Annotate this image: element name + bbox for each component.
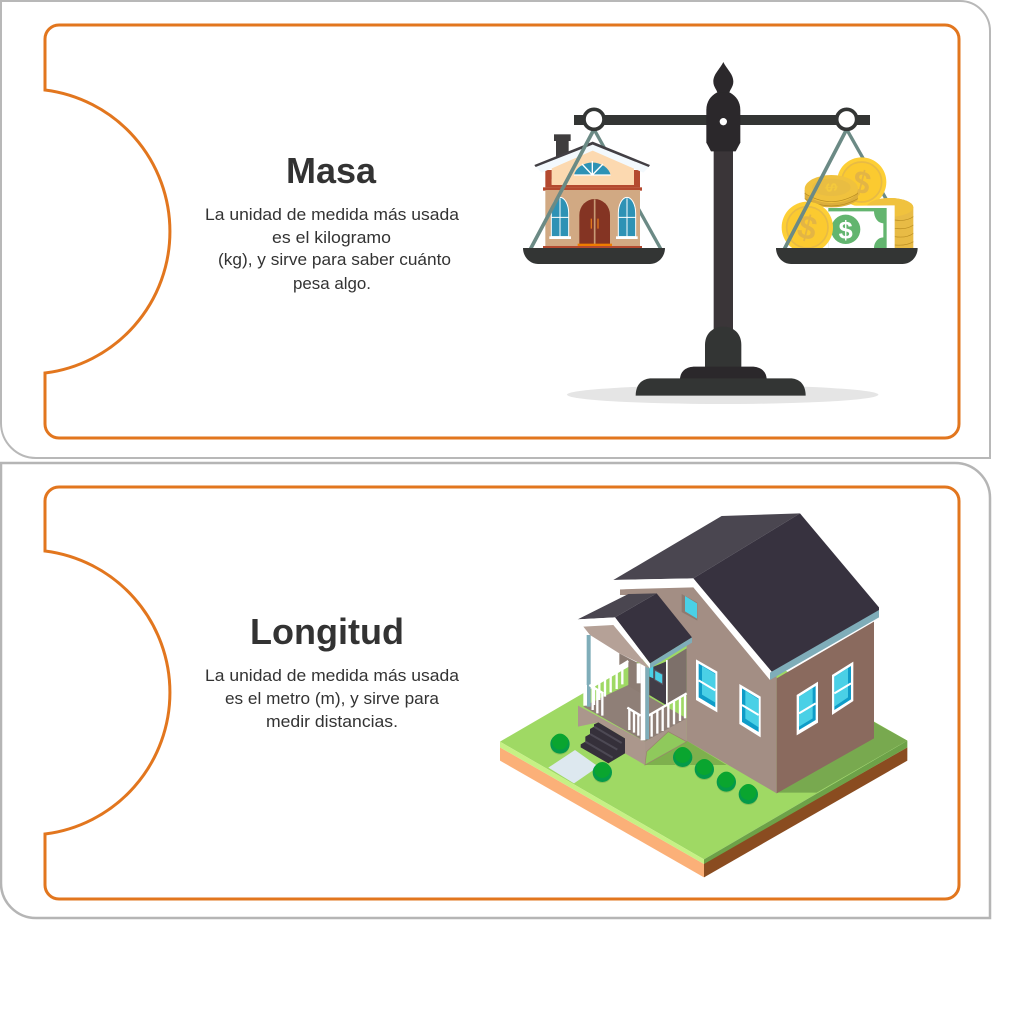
window: left wall 2 (739, 684, 761, 737)
window: left wall 1 (696, 659, 717, 712)
back railing (589, 661, 628, 705)
ground block (500, 623, 907, 877)
hub (706, 93, 740, 151)
beam (574, 115, 870, 125)
panel: longitud (1, 463, 990, 918)
porch back wall (619, 653, 649, 698)
walkway (548, 750, 598, 783)
icon: coins and banknote: $ (839, 217, 853, 245)
illustration: isometric house (500, 513, 907, 877)
text block: masa description: pesa algo. (293, 274, 371, 293)
pillar (714, 147, 733, 333)
right front post (641, 664, 649, 740)
front chains (531, 129, 847, 251)
text block: masa description (205, 205, 460, 293)
stairs (581, 722, 625, 763)
shrub: 1 (550, 734, 570, 755)
icon: coins and banknote: $ (849, 163, 875, 202)
porch floor (583, 685, 687, 742)
pivot (720, 118, 727, 125)
icon: coins and banknote (782, 157, 913, 253)
base (636, 327, 806, 396)
heading: masa: Masa (286, 150, 377, 191)
illustration: balance scale (523, 62, 918, 404)
pan: right (776, 248, 918, 264)
text block: longitud description (205, 666, 460, 731)
window: right wall 2 (832, 662, 853, 715)
shrub: 3 (673, 747, 692, 768)
icon: small house (534, 134, 650, 249)
text block: masa description: es el kilogramo (272, 228, 391, 247)
orange notched frame: longitud (45, 487, 959, 899)
finial (713, 62, 733, 93)
main roof (613, 513, 879, 680)
left post (583, 635, 591, 707)
pan: left (523, 248, 665, 264)
orange notched frame: masa (45, 25, 959, 438)
heading: longitud: Longitud (250, 611, 404, 652)
text block: masa description: (kg), y sirve para saber cuánto (218, 250, 451, 269)
front railings (589, 685, 687, 737)
icon: coins and banknote: $ (794, 208, 821, 249)
text block: longitud description: medir distancias. (266, 712, 398, 731)
shrub: 2 (593, 762, 612, 783)
porch back post (637, 663, 641, 683)
icon: coins and banknote: $ (822, 182, 839, 193)
scale ground shadow (567, 385, 878, 404)
card outline: longitud (1, 463, 990, 918)
door trim (666, 660, 668, 704)
porch base front (578, 706, 645, 765)
porch roof (578, 593, 692, 668)
back chains (594, 129, 887, 249)
beam ring: right (837, 109, 857, 129)
left wall (620, 585, 777, 793)
porch side wall (668, 648, 687, 704)
porch gable (583, 625, 648, 668)
right wall (777, 622, 874, 793)
panel: masa (1, 1, 990, 458)
card outline: masa (1, 1, 990, 458)
text block: longitud description: es el metro (m), y sirve para (225, 689, 440, 708)
porch (578, 593, 692, 765)
window: right wall 1 (797, 682, 818, 735)
text block: longitud description: La unidad de medida más usada (205, 666, 460, 685)
gable window (682, 594, 697, 621)
porch base side (645, 718, 687, 765)
shrub: 5 (717, 772, 736, 793)
shrub: 6 (739, 784, 758, 805)
beam ring: left (584, 109, 604, 129)
shrub: 4 (695, 759, 714, 780)
porch door (649, 662, 666, 705)
lattice panel (645, 732, 687, 765)
text block: masa description: La unidad de medida más usada (205, 205, 460, 224)
